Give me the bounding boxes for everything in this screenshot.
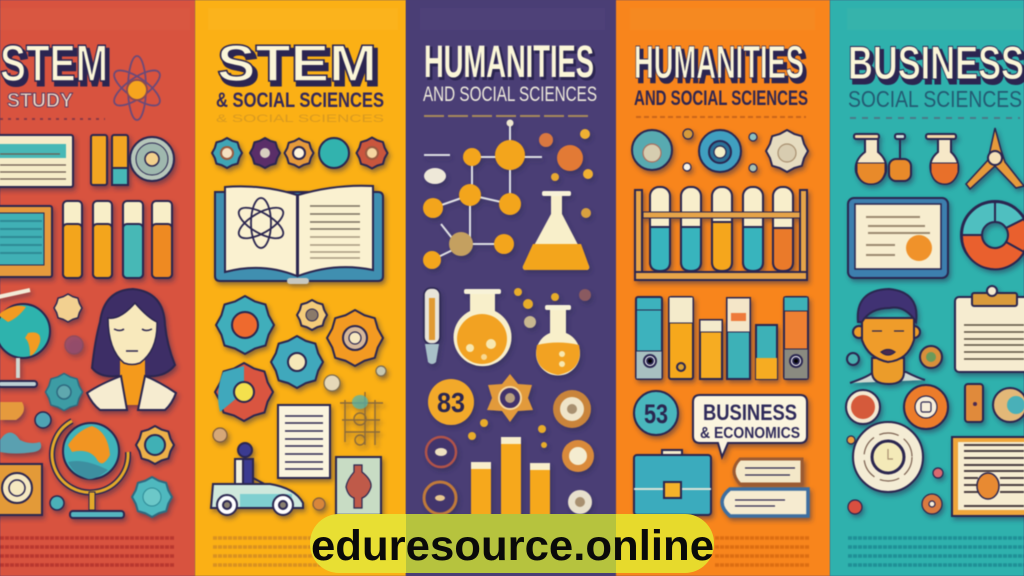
icon: open book <box>215 186 383 284</box>
icon: small badges <box>920 346 942 368</box>
icon: test tubes <box>63 201 172 278</box>
icon: small circles <box>213 366 386 510</box>
icon: dots <box>468 288 591 448</box>
icon: document panel <box>952 437 1024 516</box>
heading: humanities: HUMANITIES <box>637 40 807 92</box>
icon: circuit sketch <box>340 392 383 445</box>
icon: large globe on stand <box>52 421 128 518</box>
icon: gauge <box>130 137 174 181</box>
icons: gears doc car <box>211 296 386 515</box>
heading: STEM: STEM <box>0 35 108 93</box>
icon: tablet <box>848 198 948 278</box>
icon: cream dial <box>766 130 808 172</box>
icon: teal binder <box>636 297 662 379</box>
icon: book stack <box>722 459 808 516</box>
icon: purple badge <box>250 138 280 168</box>
icon: hex badge <box>136 426 174 464</box>
icon: clouds <box>0 402 41 454</box>
icon: framed picture <box>0 464 42 515</box>
icon: small gear <box>54 294 82 322</box>
icon: person in car <box>211 443 303 515</box>
icon: tube pair <box>91 135 128 185</box>
icon: orange badge <box>284 138 314 168</box>
icon: clipboard <box>955 286 1024 372</box>
icon: monitor <box>0 135 73 187</box>
icon: gradient tag <box>965 384 983 422</box>
subheading: AND SOCIAL SCIENCES <box>423 83 597 106</box>
icon: teal badge <box>212 138 242 168</box>
icons: screens tubes gauge <box>0 135 174 278</box>
icon: coin 83: 83 <box>437 387 465 418</box>
caption stripes <box>0 538 175 565</box>
heading: humanities <box>634 36 807 92</box>
divider beads <box>424 115 592 117</box>
heading: humanities <box>424 36 596 89</box>
icon: face portrait <box>850 289 925 384</box>
icons: dials <box>632 129 808 172</box>
panel: red STEM study <box>0 0 195 576</box>
divider beads <box>0 118 105 120</box>
icon: briefcase <box>634 450 711 515</box>
callout: business and economics: BUSINESS <box>703 400 797 425</box>
icons: flasks and star <box>854 128 1024 189</box>
caption stripes <box>848 538 1024 565</box>
icon: woman portrait <box>87 289 176 410</box>
icon: pipette <box>424 288 440 364</box>
icon: conical flask <box>523 191 589 270</box>
icon: blue disc <box>46 374 82 410</box>
icon: short binder <box>756 325 777 379</box>
panel: orange humanities <box>616 0 830 576</box>
chart: orange bars <box>471 437 550 516</box>
icon: right disc <box>993 388 1024 422</box>
icon: red gear <box>215 363 273 421</box>
icon: blue dial <box>699 130 741 172</box>
icon: teal ring <box>847 353 859 365</box>
icon: atom <box>109 56 165 120</box>
icon: vase picture <box>336 457 381 515</box>
banner: site name pill: eduresource.online <box>311 522 714 570</box>
icon: ring badges <box>424 390 594 514</box>
icon: flask two <box>926 134 958 184</box>
icon: document <box>278 405 330 478</box>
caption stripes <box>715 538 810 565</box>
chart: donut <box>962 202 1024 269</box>
subheading: social sciences: & SOCIAL SCIENCES <box>216 89 384 112</box>
divider beads <box>636 116 806 118</box>
icons: lab glass and badges <box>424 288 594 514</box>
icon: tablet <box>0 206 52 277</box>
icon: yellow binder <box>700 320 722 379</box>
icons: tablet and donut <box>848 198 1024 278</box>
icon: red disc <box>846 390 880 424</box>
icon: teal circle <box>319 138 349 168</box>
panel: teal business <box>830 0 1024 576</box>
heading: STEM: STEM <box>3 39 111 97</box>
icon: tall binder <box>727 298 750 379</box>
subheading: study: STUDY <box>7 90 74 112</box>
icons: binders <box>636 297 808 379</box>
heading: STEM: STEM <box>220 39 380 97</box>
icon: minor circles <box>847 436 943 514</box>
icon: test tube rack <box>635 187 807 280</box>
icon: tri star <box>966 128 1024 189</box>
icon: small beads <box>683 129 757 172</box>
icon: orange binder <box>669 297 693 379</box>
icon: small gear <box>297 300 327 330</box>
icon: small circles <box>35 336 83 510</box>
icon: teal dial <box>632 130 672 170</box>
icon: coin 83 <box>428 379 474 425</box>
icon: small flask <box>889 134 911 181</box>
icon: orange gear <box>327 310 383 366</box>
callout: business and economics <box>693 395 807 457</box>
icon: round flask <box>454 289 512 366</box>
heading: humanities: HUMANITIES <box>634 36 804 88</box>
icons: portrait and circles <box>846 286 1024 516</box>
icon: right binder <box>784 297 808 379</box>
icon: clock plate <box>853 422 923 492</box>
panel: yellow STEM and social sciences <box>195 0 406 576</box>
icon: teal gear mid <box>271 336 323 388</box>
icons: lower figures <box>0 289 176 518</box>
icon: small globe <box>0 290 50 387</box>
heading: humanities: HUMANITIES <box>426 38 596 89</box>
icons: badge row and book <box>212 138 388 284</box>
icon: sun gear <box>487 374 533 422</box>
subheading: AND SOCIAL SCIENCES <box>634 87 808 110</box>
icon: orange disc <box>904 385 948 429</box>
icon: coin 53: 53 <box>644 399 668 429</box>
icon: flask one <box>854 134 886 184</box>
callout: business and economics: & ECONOMICS <box>700 425 800 442</box>
icons: business row <box>634 391 808 516</box>
faint subheading: & SOCIAL SCIENCES <box>216 113 384 125</box>
chart: molecule network <box>423 120 593 269</box>
icon: teal gear large <box>216 296 274 354</box>
panel: purple humanities <box>406 0 616 576</box>
heading: STEM: STEM <box>217 35 377 93</box>
icon: small flask <box>536 305 580 375</box>
heading: humanities: HUMANITIES <box>424 36 594 87</box>
icon: red badge <box>356 138 388 168</box>
caption stripes <box>213 538 385 565</box>
divider beads <box>850 117 1020 119</box>
icon: teal gear <box>132 477 172 517</box>
icon: coin 53 <box>634 391 678 435</box>
